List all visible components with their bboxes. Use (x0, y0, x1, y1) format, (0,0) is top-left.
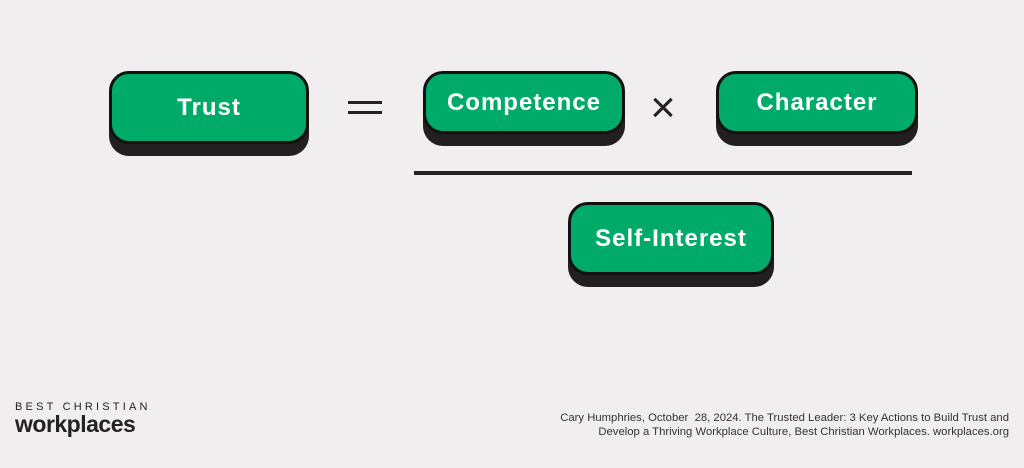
box: Competence: Competence (447, 88, 601, 116)
citation: Cary Humphries, October 28, 2024. The Trusted Leader: 3 Key Actions to Build Trust and (560, 412, 1009, 424)
box: Competence (423, 71, 625, 134)
fraction line (414, 171, 912, 175)
box: Self-Interest (568, 202, 774, 275)
logo (15, 401, 151, 437)
multiply sign: × (650, 83, 676, 132)
logo: workplaces (15, 411, 135, 437)
citation: Develop a Thriving Workplace Culture, Best Christian Workplaces. workplaces.org (598, 426, 1009, 438)
box: Character: Character (756, 88, 878, 116)
citation (560, 412, 1009, 438)
box: Self-Interest: Self-Interest (595, 224, 747, 252)
box: Character (716, 71, 918, 134)
equals sign (348, 101, 382, 114)
box: Trust: Trust (177, 94, 241, 120)
box: Trust (109, 71, 309, 144)
logo: BEST CHRISTIAN (15, 401, 151, 413)
